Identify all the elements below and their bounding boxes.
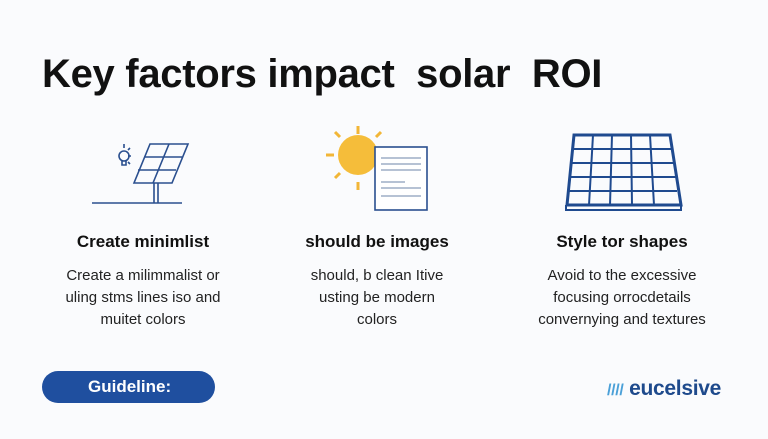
column 2 [305,232,449,328]
column 3: Style tor shapes [556,232,688,251]
column 2: colors [357,311,397,328]
icon: sun and document [326,126,428,211]
column 3: convernying and textures [538,311,706,328]
column 3: Avoid to the excessive [548,267,696,284]
icon: solar panel with bulb [92,143,190,204]
column 1: Create minimlist [77,232,209,251]
logo: //// eucelsive [607,377,721,400]
column 2: should be images [305,232,449,251]
guideline button [42,371,215,403]
column 3: focusing orrocdetails [553,289,691,306]
column 2: usting be modern [319,289,435,306]
column 1 [65,232,221,328]
column 1: muitet colors [100,311,186,328]
guideline button: Guideline: [88,377,171,396]
title: Key factors impact solar ROI [42,52,602,96]
column 3 [538,232,706,328]
column 1: Create a milimmalist or [66,267,220,284]
column 2: should, b clean Itive [311,267,443,284]
icon: solar panel grid [565,134,683,211]
column 1: uling stms lines iso and [65,289,221,306]
